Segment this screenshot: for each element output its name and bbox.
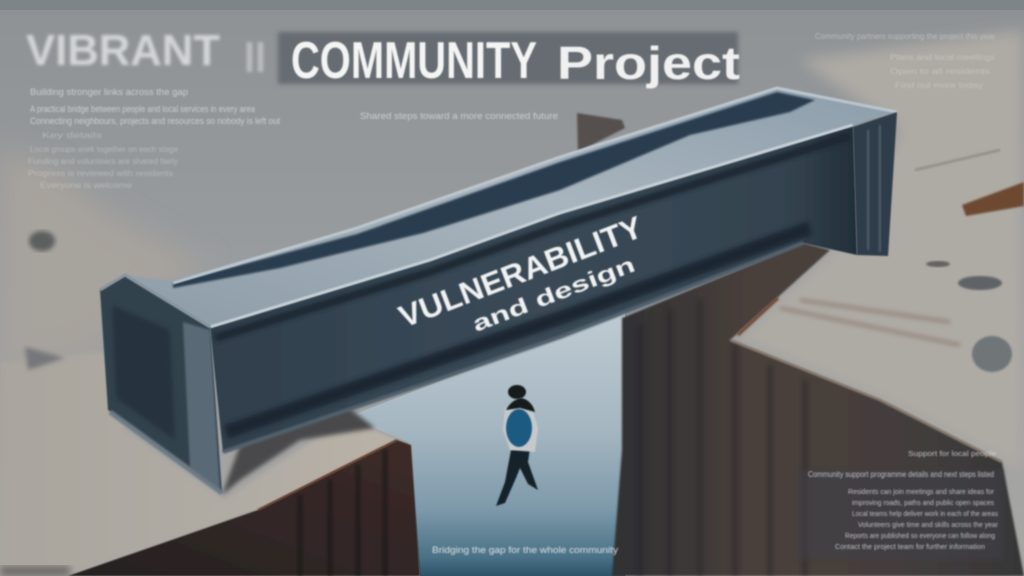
top right text block: Open to all residents — [890, 67, 990, 76]
title: COMMUNITY — [291, 32, 537, 90]
terrain: left lower ledge — [0, 352, 397, 576]
beam: top face and trough floor — [100, 88, 897, 327]
shadow under beam on left ledge — [222, 405, 375, 495]
chasm with light blue haze — [347, 310, 625, 576]
beam: right end face — [853, 112, 897, 256]
intro text block, top left: Building stronger links across the gap — [30, 87, 188, 97]
rocks and dirt details — [25, 150, 1024, 372]
title: II — [244, 33, 266, 82]
bottom right text panel: Contact the project team for further information — [835, 542, 985, 551]
beam label: VULNERABILITY — [394, 209, 648, 335]
figure: jacket — [503, 402, 538, 452]
figure: shoulders — [506, 398, 535, 412]
figure: legs — [496, 448, 538, 506]
figure: blue backpack — [506, 409, 532, 447]
top right text block — [815, 32, 995, 90]
figure walking in the chasm — [496, 385, 538, 506]
background post behind beam — [577, 113, 625, 152]
bottom right text panel: Community support programme details and next steps listed — [808, 470, 994, 479]
terrain: right plateau — [735, 30, 1024, 470]
caption at the bottom of the chasm: Bridging the gap for the whole community — [432, 545, 619, 555]
bottom right text panel: Volunteers give time and skills across the year — [858, 520, 998, 529]
bottom right text panel — [798, 451, 1003, 560]
intro text block, top left: Connecting neighbours, projects and resources so nobody is left out — [30, 116, 280, 126]
beam: front face — [210, 125, 857, 452]
left paragraph text: Progress is reviewed with residents — [28, 169, 173, 178]
beam: lower flange — [226, 228, 810, 432]
title band — [278, 32, 738, 84]
intro text block, top left — [30, 87, 558, 126]
top right text block: Community partners supporting the project this year — [815, 32, 995, 41]
title — [26, 26, 740, 90]
beam: top lip highlights — [173, 88, 897, 283]
title: VIBRANT — [26, 26, 220, 75]
top right text block: Find out more today — [895, 81, 983, 90]
bottom right text panel: Residents can join meetings and share ideas for — [848, 487, 994, 496]
bottom right text panel: Reports are published so everyone can follow along — [845, 531, 995, 540]
terrain: far left ground — [0, 148, 210, 370]
left paragraph text: Everyone is welcome — [40, 181, 133, 190]
left cliff face — [68, 440, 420, 576]
left paragraph text: Funding and volunteers are shared fairly — [28, 157, 178, 166]
beam label: and design — [469, 252, 638, 337]
intro text block, top left: Shared steps toward a more connected future — [360, 111, 558, 121]
left paragraph text — [28, 131, 179, 190]
beam: left end face — [100, 275, 222, 493]
left paragraph text: Local groups work together on each stage — [30, 145, 179, 154]
bottom right text panel: Support for local people — [908, 451, 996, 458]
bottom right text panel: Local teams help deliver work in each of the areas — [852, 509, 998, 518]
bottom right text panel: improving roads, paths and public open spaces — [852, 498, 994, 507]
intro text block, top left: A practical bridge between people and local services in every area — [30, 104, 255, 114]
steel beam — [100, 88, 897, 493]
figure: head — [508, 385, 526, 399]
right cliff face — [612, 243, 1024, 576]
left paragraph text: Key details — [42, 131, 102, 140]
top right text block: Plans and local meetings — [890, 53, 995, 62]
beam: dark trough channel — [173, 92, 815, 288]
title: Project — [557, 37, 740, 89]
